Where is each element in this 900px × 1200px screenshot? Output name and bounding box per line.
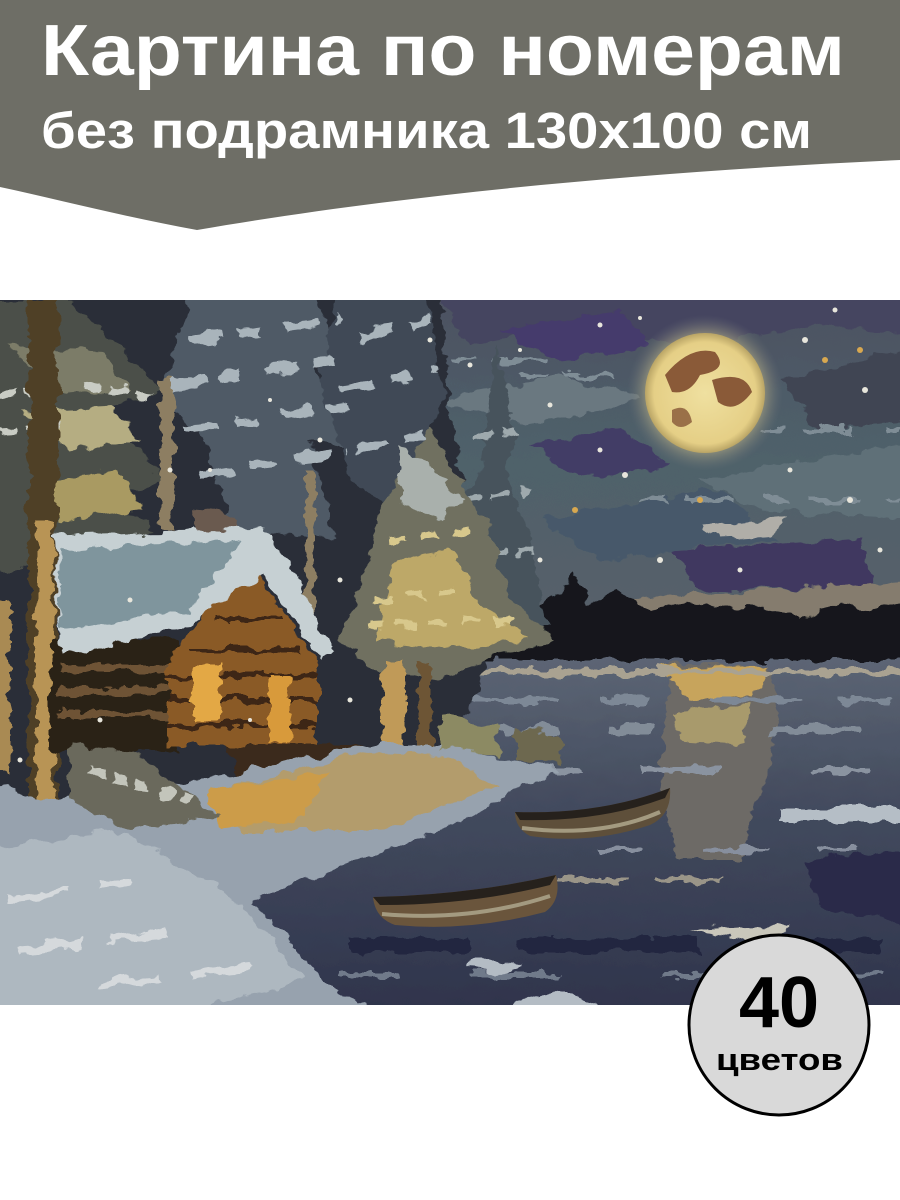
- title: Картина по номерам: [41, 11, 845, 91]
- header banner: [0, 0, 900, 230]
- painting: winter cabin by the lake: [0, 280, 900, 1020]
- canoe lower: [373, 875, 558, 927]
- snowy tall pines: [160, 280, 548, 625]
- badge label: цветов: [716, 1042, 843, 1077]
- chimney: [192, 508, 238, 533]
- badge: 40 colours: [689, 935, 869, 1115]
- cabin: [50, 560, 365, 775]
- sky: [440, 300, 900, 619]
- snow drifts in water: [466, 957, 598, 1005]
- moon: [632, 320, 778, 466]
- badge number: 40: [739, 963, 819, 1043]
- canoe upper: [515, 788, 670, 839]
- far tree line: [470, 572, 900, 672]
- water: [230, 660, 900, 1020]
- snow shore: [0, 715, 560, 1020]
- falling snowflakes: [18, 308, 882, 762]
- dark forest background: [0, 280, 490, 830]
- subtitle: без подрамника 130х100 см: [41, 102, 812, 159]
- left foreground pine: [0, 300, 315, 805]
- snowy cabin roof: [55, 528, 333, 660]
- golden lit tree: [340, 430, 555, 745]
